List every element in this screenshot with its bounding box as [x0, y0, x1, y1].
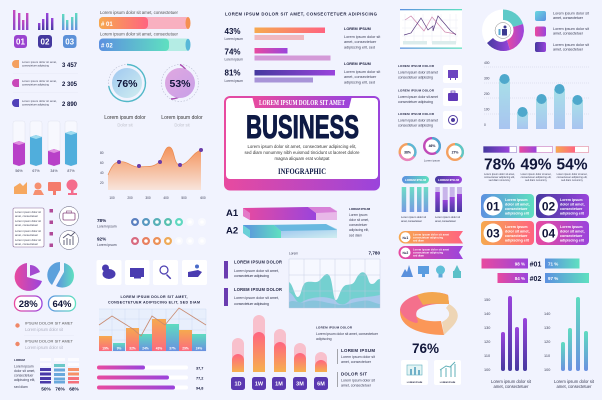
icon text list: Lorem ipsum dolor sit amet	[398, 95, 438, 99]
card 04: Lorem ipsum	[560, 225, 583, 229]
big percentage stats: consectetuer adipiscing elit,	[557, 176, 588, 179]
rounded column chart: 400	[484, 61, 490, 65]
area line chart: 600	[200, 196, 206, 200]
purple bar chart: Lorem ipsum dolor sit	[491, 379, 532, 384]
card 03: Lorem ipsum	[505, 225, 528, 229]
ring gauge 76%: Dolor sit	[117, 122, 134, 128]
teal bar chart: 120	[544, 340, 550, 344]
card 01	[481, 194, 534, 218]
stat list: Lorem ipsum dolor sit amet,	[22, 99, 57, 103]
3D ring chart	[400, 292, 458, 356]
stacked area chart: 7,780	[368, 250, 380, 256]
bullet rows: Lorem ipsum dolor sit	[25, 327, 64, 332]
icon text list: consectetuer adipiscing	[398, 76, 433, 80]
dot rating rows: 78%	[97, 218, 106, 223]
card 04: consectetuer	[560, 234, 583, 238]
teal bar chart: 140	[544, 312, 550, 316]
segmented bars with text: 68%	[69, 386, 80, 392]
column and line chart: 9%	[117, 346, 121, 350]
chart heading	[108, 295, 200, 304]
chart heading: CONSECTETUER ADIPISCING ELIT, SED DIAM	[108, 300, 200, 304]
column and line chart: 29%	[182, 346, 189, 350]
left text list: consectetuer adipiscing	[234, 274, 269, 278]
text blocks beside pill chart: amet, consectetuer	[341, 384, 372, 388]
A1 and A2 3D bars: A1	[226, 208, 239, 219]
column and line chart: 24%	[196, 346, 202, 350]
stat list: consectetuer adipiscing	[22, 102, 50, 106]
left text list: Lorem ipsum dolor sit amet,	[234, 296, 279, 300]
progress bars 01 and 02	[99, 10, 190, 51]
description	[244, 144, 360, 161]
stacked vertical bars	[401, 176, 462, 223]
dot rating rows: 92%	[97, 236, 106, 242]
card 02	[536, 194, 589, 218]
bottom icon tiles: LOREM IPSUM	[440, 382, 455, 384]
big percentage stats: consectetuer adipiscing elit,	[521, 176, 552, 179]
card 01: Lorem ipsum	[505, 198, 528, 202]
icon tiles row	[96, 260, 207, 285]
stacked vertical bars: LOREM IPSUM	[405, 178, 427, 182]
left text list	[224, 260, 282, 306]
bottom icon tiles	[401, 360, 461, 385]
teal bar chart: 130	[544, 326, 550, 330]
percentage bars 43 74 81	[224, 27, 381, 84]
ribbon labels: №2	[403, 251, 408, 255]
column and line chart: 24%	[142, 346, 149, 350]
pie charts with percent badges	[14, 262, 76, 311]
ribbon labels: sed diam	[413, 240, 425, 242]
left text list: LOREM IPSUM DOLOR	[234, 287, 282, 292]
stat list: 3 457	[62, 63, 78, 69]
text card with outlined icons: amet, consectetuer	[15, 242, 38, 246]
segmented bars with text: sed diam	[14, 385, 28, 389]
ring gauge 53%	[161, 64, 203, 128]
ribbon labels: sed diam	[413, 254, 425, 258]
donut chart with legend: Lorem ipsum dolor sit	[553, 27, 590, 31]
purple bar chart: 110	[484, 354, 490, 358]
description: magna aliquam erat volutpat	[274, 156, 330, 161]
bullet rows	[15, 320, 74, 350]
percentage bars 43 74 81: Lorem ipsum	[224, 37, 243, 41]
bottom icon tiles: LOREM IPSUM	[407, 382, 422, 384]
small ring gauges	[400, 138, 463, 162]
segmented bars with text: adipiscing elit,	[14, 378, 35, 382]
left text list: LOREM IPSUM DOLOR	[234, 260, 282, 264]
pill columns with period buttons	[231, 315, 328, 390]
small ring gauges: 27%	[452, 150, 458, 154]
icon text list: consectetuer adipiscing	[398, 124, 433, 128]
column and line chart: 37%	[169, 346, 176, 350]
3D cylinder bars: 67%	[32, 169, 40, 173]
dot rating rows: Lorem ipsum	[97, 243, 117, 247]
A1 and A2 3D bars	[226, 207, 371, 238]
text blocks beside pill chart: Lorem ipsum dolor sit amet, consectetuer	[316, 332, 379, 336]
dot rating rows: Lorem ipsum	[97, 224, 117, 228]
segmented bars with text: dolor sit amet,	[14, 369, 35, 373]
ribbon labels	[398, 231, 463, 259]
big percentage stats: 54%	[556, 156, 588, 174]
dot rating rows	[97, 218, 205, 247]
text blocks beside pill chart: amet, consectetuer	[341, 360, 372, 364]
card 01: adipiscing elit	[505, 212, 530, 216]
big percentage stats: sed diam nonummy	[561, 179, 584, 182]
rounded column chart: 300	[484, 76, 490, 80]
stat list: 2 890	[62, 102, 78, 108]
segmented bars with text: LOREM	[14, 358, 25, 362]
percent label: 76%	[412, 341, 439, 356]
text blocks beside pill chart	[316, 326, 379, 388]
pill columns with period buttons: 1D	[234, 382, 242, 388]
area line chart: 60	[100, 161, 104, 165]
comparison bars #01 #02: 97 %	[548, 276, 558, 281]
comparison bars #01 #02: 98 %	[515, 262, 525, 266]
ring gauge 76%: Lorem ipsum dolor	[104, 115, 146, 121]
stacked vertical bars: amet, consectetuer	[435, 219, 456, 223]
top middle heading: LOREM IPSUM DOLOR SIT AMET, CONSECTETUER ADIPISCING	[225, 12, 378, 16]
ring gauge 53%: Dolor sit	[174, 122, 191, 128]
column and line chart: 32%	[129, 346, 136, 350]
text card with outlined icons: amet, consectetuer	[15, 233, 38, 237]
card 01: consectetuer	[505, 207, 528, 211]
bullet rows: IPSUM DOLOR SIT AMET	[25, 338, 74, 344]
percentage bars 43 74 81: Lorem ipsum dolor sit	[344, 35, 381, 39]
big percentage stats: 49%	[520, 156, 552, 174]
blue icons row	[401, 265, 461, 278]
small ring gauges: 38%	[404, 150, 411, 154]
text card with outlined icons: Lorem ipsum dolor sit	[15, 238, 41, 242]
big percentage stats	[484, 146, 588, 182]
ring gauge 53%: Lorem ipsum dolor	[161, 115, 203, 121]
card 02: dolor sit amet,	[560, 202, 585, 206]
badge 03: 03	[65, 38, 75, 46]
purple bar chart: 140	[484, 312, 490, 316]
stacked area chart: Lorem	[289, 252, 298, 256]
area line chart: 300	[145, 196, 151, 200]
text blocks beside pill chart: LOREM IPSUM DOLOR	[316, 326, 353, 330]
stacked vertical bars: Lorem ipsum dolor sit	[401, 215, 426, 219]
card 04	[536, 221, 589, 245]
big percentage stats: sed diam nonummy	[525, 179, 548, 182]
text card with outlined icons: Lorem ipsum dolor sit	[15, 219, 41, 223]
rounded column chart: 0	[484, 123, 486, 127]
chart heading: LOREM IPSUM DOLOR SIT AMET,	[120, 295, 188, 299]
donut chart with legend: amet, consectetuer	[553, 32, 584, 36]
horizontal progress bars: 77,2	[196, 376, 203, 380]
ribbon labels: Lorem ipsum dolor sit amet	[413, 248, 449, 252]
pill columns with period buttons: 1M	[275, 382, 283, 388]
card 03: adipiscing elit	[505, 238, 530, 242]
card 03: 03	[486, 226, 500, 240]
text card with outlined icons: Lorem ipsum dolor sit	[15, 210, 41, 214]
comparison bars #01 #02: 71 %	[548, 262, 558, 266]
badge 64%: 64%	[52, 299, 72, 310]
progress bars 01 and 02: Lorem ipsum dolor sit amet, consectetuer	[100, 10, 179, 15]
icon text list: LOREM IPSUM DOLOR	[398, 88, 435, 92]
left text list: consectetuer adipiscing	[234, 302, 269, 306]
big percentage stats: sed diam nonummy	[489, 179, 511, 182]
percentage bars 43 74 81: adipiscing elit, sed	[344, 46, 375, 50]
comparison bars #01 #02: #02	[530, 276, 541, 283]
purple bar chart: 150	[484, 298, 490, 302]
description: sed diam nonummy nibh euismod tincidunt ut laoreet dolore	[244, 150, 360, 155]
line chart panel	[400, 9, 462, 49]
A1 and A2 3D bars: LOREM IPSUM	[349, 207, 371, 211]
text blocks beside pill chart: adipiscing	[316, 337, 332, 341]
percentage bars 43 74 81: 74%	[224, 48, 241, 56]
stat list	[12, 60, 78, 108]
area line chart: 80	[100, 151, 104, 155]
horizontal progress bars: 94,8	[196, 386, 203, 390]
segmented bars with text: consectetuer	[14, 374, 34, 378]
3D cylinder bars: 34%	[50, 169, 58, 173]
icon text list: LOREM IPSUM DOLOR	[398, 112, 435, 116]
card 01: dolor sit amet,	[505, 202, 530, 206]
left text list: Lorem ipsum dolor sit amet,	[234, 269, 279, 273]
card 03: dolor sit amet,	[505, 230, 530, 234]
column and line chart: 43%	[156, 346, 162, 350]
percentage bars 43 74 81: amet, consectetuer	[344, 40, 377, 44]
area line chart: 500	[181, 196, 187, 200]
badge 01: 01	[16, 38, 25, 46]
stacked vertical bars: Lorem ipsum dolor sit	[435, 215, 460, 219]
numbered cards	[481, 194, 589, 245]
percentage bars 43 74 81: adipiscing elit, sed	[344, 80, 375, 84]
progress bars 01 and 02: # 01	[101, 22, 113, 28]
percentage bars 43 74 81: LOREM IPSUM	[344, 62, 371, 66]
purple bar chart: 100	[484, 368, 490, 372]
area line chart: 400	[163, 196, 169, 200]
mini bar sets with number badges	[13, 10, 77, 48]
big percentage stats: consectetuer adipiscing elit,	[484, 176, 515, 179]
rounded column chart: 100	[484, 108, 490, 112]
card 01: 01	[486, 200, 500, 214]
stat list: consectetuer adipiscing	[22, 82, 50, 86]
A1 and A2 3D bars: dolor sit amet,	[349, 218, 369, 222]
A1 and A2 3D bars: Lorem ipsum	[349, 213, 368, 217]
ribbon labels: Lorem ipsum dolor sit amet	[413, 234, 449, 236]
text blocks beside pill chart: Lorem ipsum dolor sit	[341, 378, 375, 382]
rounded column chart: 200	[484, 92, 490, 96]
card 02: 02	[542, 200, 555, 214]
donut chart with legend: amet, consectetuer	[553, 16, 584, 20]
area line chart: 100	[109, 196, 115, 200]
card 03: consectetuer	[505, 234, 528, 238]
comparison bars #01 #02: 84 %	[515, 276, 525, 281]
subtitle: INFOGRAPHIC	[278, 167, 326, 176]
horizontal progress bars: 37,7	[196, 366, 203, 370]
badge 02: 02	[41, 38, 50, 46]
stat list: 2 305	[62, 82, 78, 88]
big percentage stats: Lorem ipsum dolor sit amet,	[484, 173, 515, 176]
donut chart with legend: Lorem ipsum dolor sit	[553, 43, 590, 47]
pill columns with period buttons: 3M	[296, 382, 304, 388]
teal bar chart: 100	[544, 368, 550, 372]
A1 and A2 3D bars: A2	[226, 226, 238, 236]
A1 and A2 3D bars: adipiscing elit,	[349, 228, 369, 232]
card 02: consectetuer	[560, 207, 583, 211]
area line chart	[100, 147, 206, 200]
progress bars 01 and 02: Lorem ipsum dolor sit amet, consectetuer	[100, 32, 179, 36]
teal bar chart: 110	[544, 354, 550, 358]
card 03	[481, 221, 534, 245]
donut chart with legend: amet, consectetuer	[553, 48, 584, 52]
text card with outlined icons: Lorem ipsum dolor sit	[15, 229, 41, 233]
bullet rows: Lorem ipsum dolor sit	[25, 345, 64, 350]
pill columns with period buttons: 6M	[317, 382, 325, 388]
orange icon row	[14, 180, 78, 195]
panel: business title card	[224, 96, 380, 190]
big percentage stats: 78%	[484, 156, 515, 174]
text card with outlined icons: amet, consectetuer	[15, 223, 38, 227]
card 02: Lorem ipsum	[560, 198, 583, 202]
bullet rows: IPSUM DOLOR SIT AMET	[25, 320, 74, 326]
ribbon labels: consectetuer adipiscing	[413, 236, 443, 240]
purple bar chart: 120	[484, 340, 490, 344]
percentage bars 43 74 81: Lorem ipsum dolor sit	[344, 70, 381, 74]
icon text list: LOREM IPSUM DOLOR	[398, 64, 435, 68]
teal bar chart: amet, consectetuer	[556, 384, 592, 389]
area line chart: 20	[100, 181, 104, 185]
text blocks beside pill chart: LOREM IPSUM	[341, 348, 375, 353]
percentage bars 43 74 81: LOREM IPSUM	[344, 27, 371, 31]
text blocks beside pill chart: Lorem ipsum dolor sit	[341, 355, 375, 359]
segmented bars with text: 50%	[41, 386, 52, 392]
icon text list: Lorem ipsum dolor sit amet	[398, 70, 438, 74]
title: BUSINESS	[246, 109, 359, 145]
stat list: Lorem ipsum dolor sit amet,	[22, 60, 57, 64]
percentage bars 43 74 81: Lorem ipsum	[224, 58, 243, 62]
text card with outlined icons: amet, consectetuer	[15, 214, 38, 218]
purple bar chart: amet, consectetuer	[494, 384, 529, 389]
3D cylinder bars: 56%	[15, 169, 23, 173]
percentage bars 43 74 81: amet, consectetuer	[344, 75, 377, 79]
text card with outlined icons	[13, 206, 78, 250]
progress bars 01 and 02: # 02	[101, 44, 113, 50]
pill columns with period buttons: 1W	[255, 382, 264, 388]
stacked area chart	[289, 250, 380, 308]
stat list: consectetuer adipiscing	[22, 64, 50, 68]
segmented bars with text	[14, 358, 80, 392]
stacked vertical bars: LOREM IPSUM	[438, 178, 460, 182]
small ring gauges: Lorem ipsum	[424, 158, 441, 162]
card 04: 04	[542, 226, 555, 240]
card 04: adipiscing elit	[560, 238, 585, 242]
percentage bars 43 74 81: 81%	[224, 68, 241, 78]
description: Lorem ipsum dolor sit amet, consectetuer adipiscing elit,	[248, 144, 356, 149]
purple bar chart	[484, 296, 532, 389]
teal bar chart	[544, 297, 595, 389]
3D cylinder bars: 87%	[67, 169, 75, 173]
ring gauge 53%: 53%	[169, 78, 191, 90]
teal bar chart: Lorem ipsum dolor sit	[554, 379, 595, 384]
segmented bars with text: Lorem ipsum	[14, 364, 34, 368]
area line chart: 40	[100, 171, 104, 175]
icon text list: consectetuer adipiscing	[398, 100, 433, 104]
purple bar chart: 130	[484, 326, 490, 330]
ribbon labels: consectetuer adipiscing	[413, 252, 443, 254]
ring gauge 76%: 76%	[116, 78, 138, 90]
column and line chart: 19%	[102, 346, 109, 350]
donut chart with legend: Lorem ipsum dolor sit	[553, 12, 590, 16]
icon text list: Lorem ipsum dolor sit amet	[398, 118, 438, 122]
panel: business title card: LOREM IPSUM DOLOR SIT AMET	[259, 99, 345, 107]
stat list: Lorem ipsum dolor sit amet,	[22, 79, 57, 83]
big percentage stats: Lorem ipsum dolor sit amet,	[557, 173, 588, 176]
ring gauge 76%	[104, 64, 146, 128]
comparison bars #01 #02	[482, 258, 589, 283]
donut chart with legend	[482, 9, 590, 52]
stacked vertical bars: amet, consectetuer	[401, 219, 422, 223]
column and line chart	[99, 308, 206, 351]
card 04: dolor sit amet,	[560, 230, 585, 234]
A1 and A2 3D bars: consectetuer	[349, 223, 368, 227]
horizontal progress bars	[97, 366, 203, 390]
area line chart: 200	[127, 196, 133, 200]
text blocks beside pill chart: DOLOR SIT	[341, 372, 367, 376]
3D cylinder bars	[13, 121, 77, 173]
icon text list	[398, 64, 462, 129]
small ring gauges: 46%	[429, 144, 435, 148]
ribbon labels: №1	[403, 236, 408, 240]
segmented bars with text: 76%	[55, 386, 66, 392]
big percentage stats: Lorem ipsum dolor sit amet,	[521, 173, 552, 176]
percentage bars 43 74 81: 43%	[224, 27, 241, 36]
percentage bars 43 74 81: Lorem ipsum	[224, 79, 243, 83]
comparison bars #01 #02: #01	[530, 262, 541, 268]
badge 28%: 28%	[19, 299, 38, 310]
card 02: adipiscing elit	[560, 212, 585, 216]
rounded column chart	[484, 61, 590, 129]
A1 and A2 3D bars: sed diam	[349, 234, 362, 238]
